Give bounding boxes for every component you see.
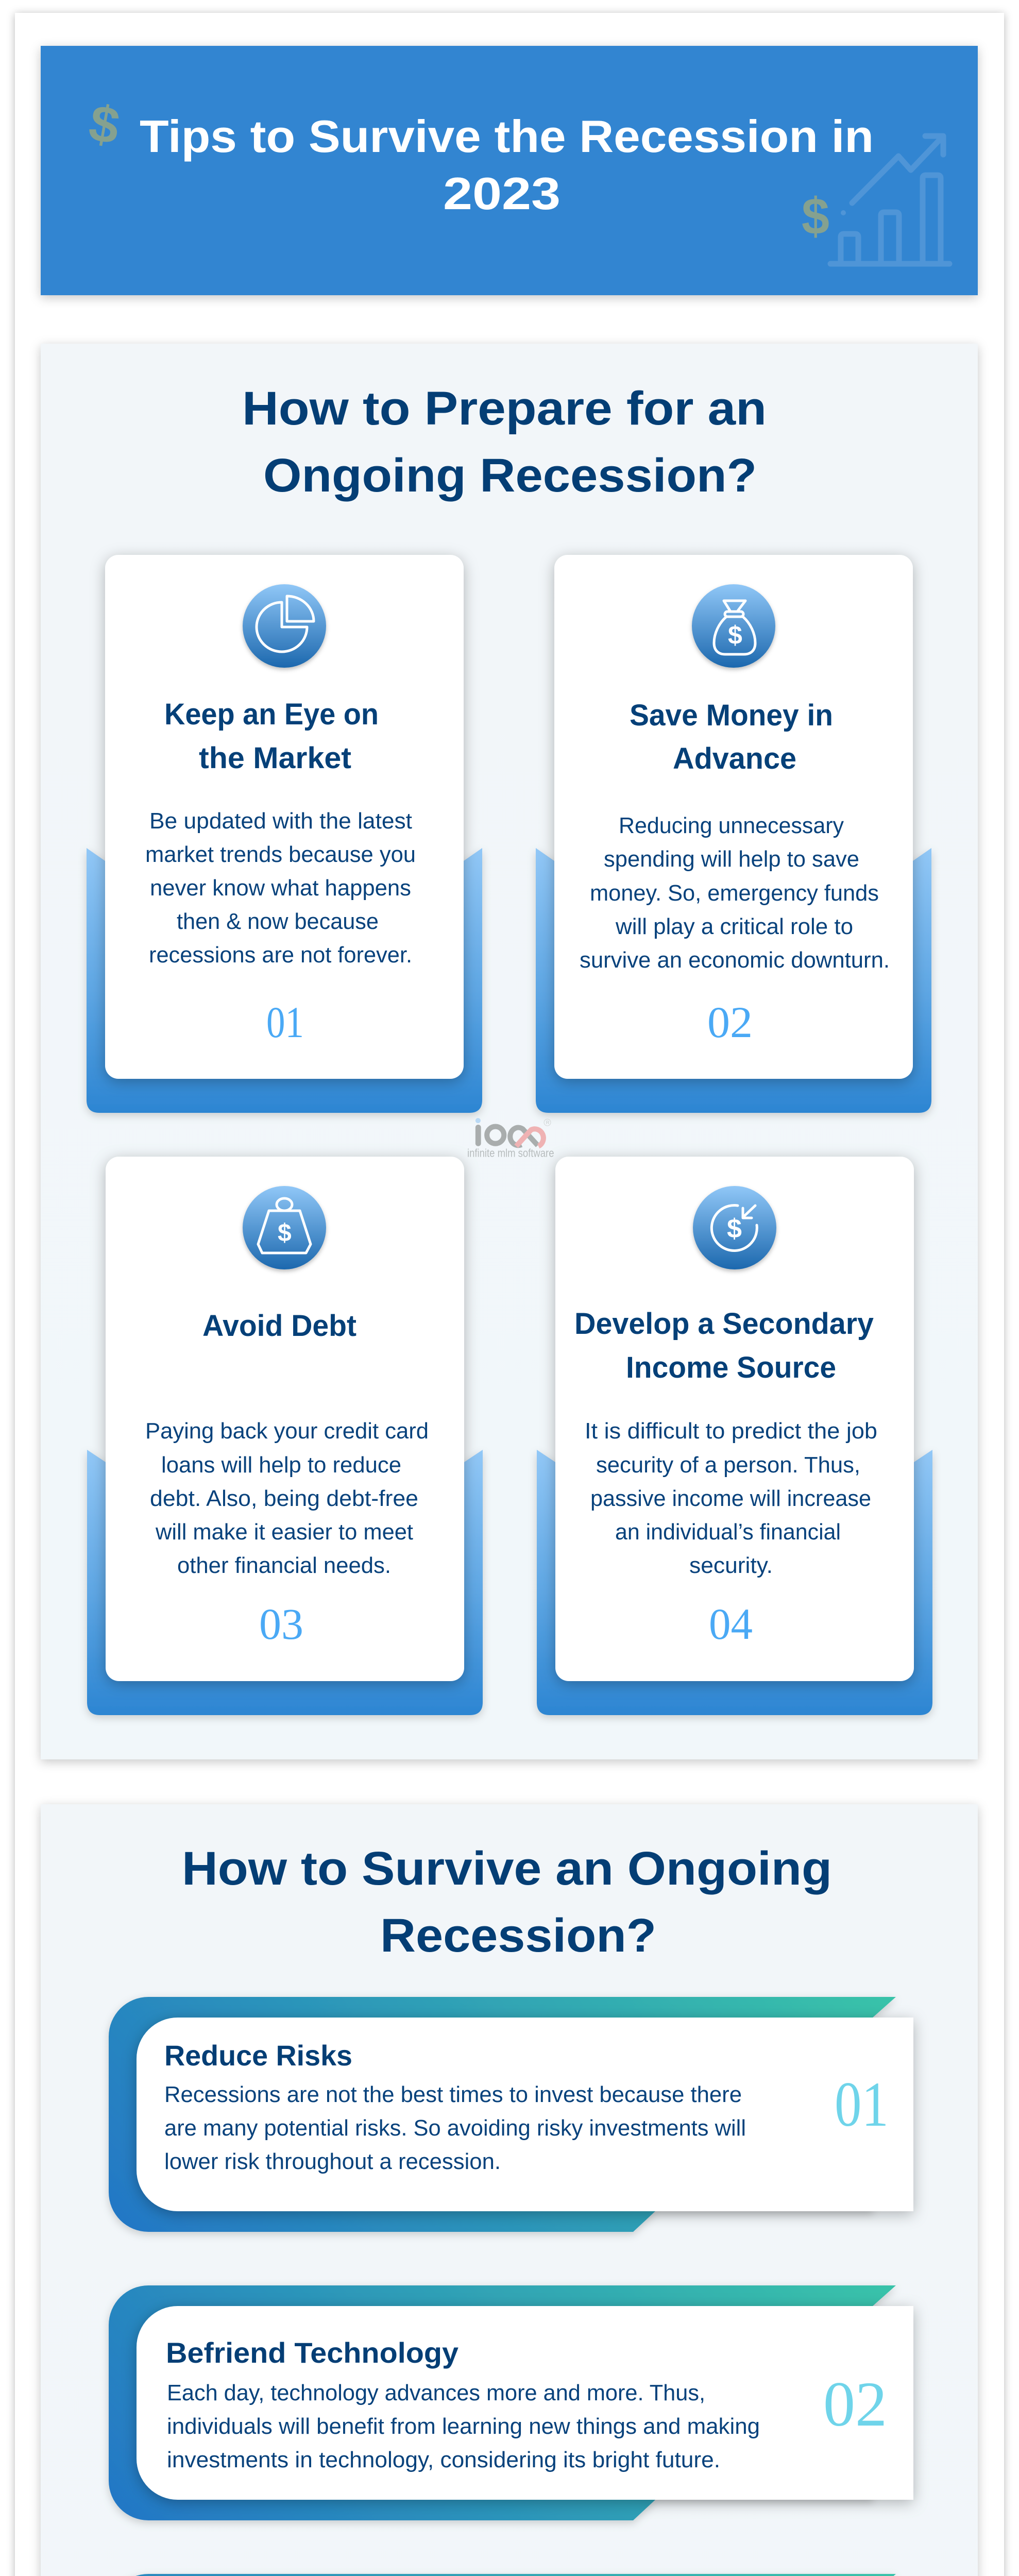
heading: survive: [182, 1842, 832, 1962]
title: [140, 111, 874, 219]
card text: market trends because you: [145, 842, 416, 867]
number 03: 03: [259, 1599, 303, 1649]
card title: the Market: [199, 741, 351, 775]
number 01: 01: [266, 997, 304, 1047]
card text: spending will help to save: [604, 846, 859, 872]
icon: income cycle: $: [727, 1214, 742, 1244]
strip text: individuals will benefit from learning new things and making: [167, 2414, 760, 2439]
heading: survive: How to Survive an Ongoing: [182, 1842, 832, 1895]
icon: dollar sign left: $: [85, 94, 124, 156]
card 03: [87, 1157, 483, 1715]
heading: prepare: [242, 382, 767, 502]
card text: [145, 1418, 429, 1578]
card text: [145, 808, 416, 968]
strip title: Befriend Technology: [166, 2336, 458, 2369]
icon: debt weight: $: [278, 1219, 292, 1247]
card text: other financial needs.: [177, 1553, 391, 1578]
icon: dollar sign right: $: [802, 188, 829, 245]
card text: security of a person. Thus,: [596, 1452, 860, 1478]
strip text: investments in technology, considering its bright future.: [167, 2447, 720, 2472]
card text: Be updated with the latest: [149, 808, 412, 834]
strip text: are many potential risks. So avoiding risky investments will: [164, 2115, 746, 2141]
icon: money bag: $: [728, 621, 742, 650]
card text: recessions are not forever.: [149, 942, 412, 968]
card text: survive an economic downturn.: [580, 947, 890, 973]
strip title: Reduce Risks: [164, 2039, 352, 2072]
number 04: 04: [709, 1599, 753, 1649]
card title: [574, 1307, 874, 1384]
card 01: [87, 555, 482, 1113]
panel: how to survive: [41, 1804, 978, 2576]
card title: [630, 699, 833, 775]
card text: will play a critical role to: [615, 914, 853, 939]
card title: Advance: [673, 742, 796, 775]
card title: [164, 698, 379, 775]
number 01: 01: [835, 2069, 889, 2140]
card text: then & now because: [177, 909, 379, 934]
strip text: [164, 2082, 746, 2174]
card title: Avoid Debt: [202, 1309, 356, 1343]
card text: [585, 1418, 877, 1578]
card text: debt. Also, being debt-free: [150, 1486, 418, 1511]
card title: Keep an Eye on: [164, 698, 379, 731]
logo watermark: [467, 1118, 554, 1160]
card text: Paying back your credit card: [145, 1418, 429, 1444]
strip text: lower risk throughout a recession.: [164, 2149, 501, 2174]
card text: [580, 813, 890, 973]
card 02: [536, 555, 931, 1113]
heading: prepare: Ongoing Recession?: [263, 449, 757, 502]
heading: survive: Recession?: [380, 1909, 656, 1962]
number 02: 02: [707, 997, 753, 1047]
icon: income cycle: [693, 1186, 776, 1269]
card text: Reducing unnecessary: [619, 813, 844, 838]
icon: money bag: [692, 584, 775, 668]
card title: Save Money in: [630, 699, 833, 732]
card title: Develop a Secondary: [574, 1307, 874, 1341]
strip 01: [109, 1997, 913, 2232]
card text: money. So, emergency funds: [590, 880, 879, 906]
card text: an individual’s financial: [615, 1519, 841, 1545]
strip 02: [109, 2285, 913, 2520]
card text: security.: [689, 1553, 773, 1578]
icon: debt weight: [243, 1186, 326, 1269]
icon: rising bar chart: [830, 136, 949, 264]
header banner: [41, 46, 978, 295]
card text: loans will help to reduce: [161, 1452, 401, 1478]
title: 2023: [443, 168, 561, 219]
strip text: Each day, technology advances more and more. Thus,: [167, 2380, 705, 2405]
number 02: 02: [823, 2369, 887, 2439]
card text: never know what happens: [150, 875, 411, 901]
card text: It is difficult to predict the job: [585, 1418, 877, 1444]
logo watermark: infinite mlm software: [467, 1147, 554, 1160]
panel: how to prepare: [41, 344, 978, 1759]
strip text: [167, 2380, 760, 2472]
card 04: [537, 1157, 932, 1715]
heading: prepare: How to Prepare for an: [242, 382, 767, 435]
card title: Income Source: [626, 1351, 836, 1384]
card text: will make it easier to meet: [155, 1519, 413, 1545]
strip text: Recessions are not the best times to invest because there: [164, 2082, 742, 2107]
title: Tips to Survive the Recession in: [140, 111, 874, 162]
card text: passive income will increase: [590, 1486, 871, 1511]
logo watermark: R: [546, 1120, 550, 1125]
strip 03: [109, 2574, 913, 2576]
icon: pie chart: [243, 584, 326, 668]
